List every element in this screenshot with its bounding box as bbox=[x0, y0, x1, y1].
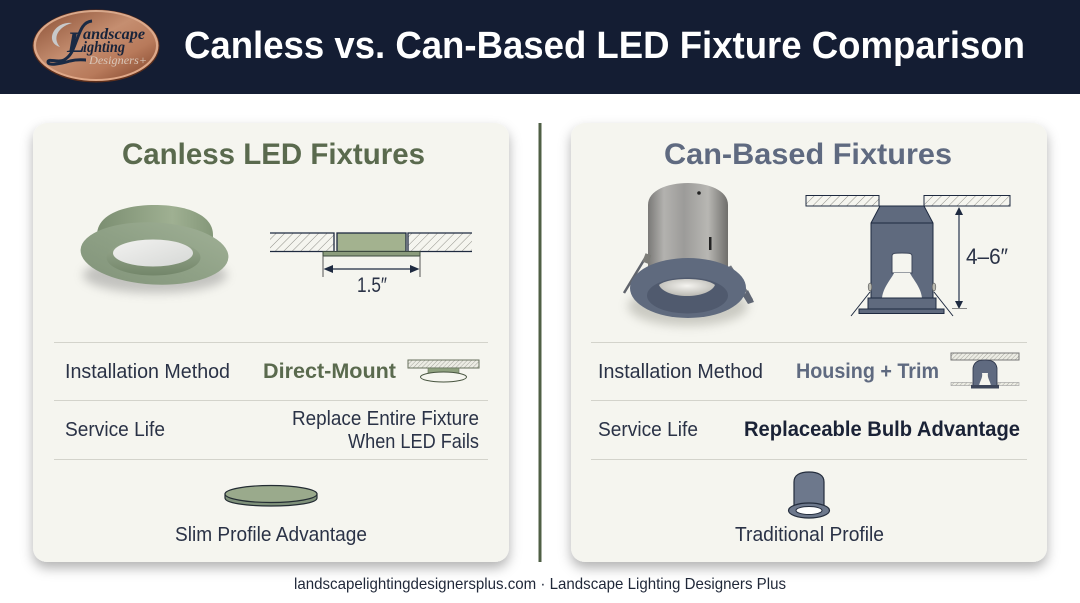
dimension: 1.5 inch: 1.5″ bbox=[357, 274, 387, 297]
row: installation method: Housing + Trim bbox=[796, 360, 939, 383]
icon: slim disc bbox=[225, 486, 317, 506]
row: service life: Replace Entire Fixture bbox=[292, 408, 479, 430]
logo: L bbox=[66, 26, 85, 59]
row: service life: Replaceable Bulb Advantage bbox=[744, 418, 1020, 441]
row: installation method: Direct-Mount bbox=[263, 360, 396, 383]
heading: canless: Canless LED Fixtures bbox=[122, 138, 425, 171]
row: service life bbox=[591, 400, 1027, 460]
label: slim profile advantage: Slim Profile Advantage bbox=[175, 524, 367, 546]
panel: can-based fixtures bbox=[571, 123, 1047, 562]
logo bbox=[32, 10, 160, 82]
row: service life: Service Life bbox=[65, 419, 165, 441]
can fixture illustration bbox=[624, 183, 754, 326]
header banner bbox=[0, 0, 1080, 94]
dimension: 4-6 inch: 4–6″ bbox=[966, 244, 1008, 269]
canless fixture illustration bbox=[79, 205, 230, 293]
logo: Designers+ bbox=[88, 55, 147, 67]
title: Canless vs. Can-Based LED Fixture Comparison bbox=[184, 25, 1025, 67]
canless section diagram bbox=[270, 233, 472, 297]
can section diagram bbox=[806, 196, 1010, 316]
row: service life: When LED Fails bbox=[348, 431, 479, 453]
panel: canless LED fixtures bbox=[33, 123, 509, 562]
logo: ighting bbox=[83, 39, 125, 56]
row: service life bbox=[54, 400, 488, 460]
row: installation method bbox=[591, 342, 1027, 388]
row: installation method: Installation Method bbox=[598, 361, 763, 383]
row: installation method: Installation Method bbox=[65, 361, 230, 383]
row: service life: Service Life bbox=[598, 419, 698, 441]
row: installation method bbox=[54, 342, 488, 383]
footer: landscapelightingdesignersplus.com · Landscape Lighting Designers Plus bbox=[294, 576, 786, 593]
heading: can-based: Can-Based Fixtures bbox=[664, 138, 952, 171]
icon: traditional can bbox=[788, 472, 830, 518]
centre divider bbox=[538, 123, 542, 562]
label: traditional profile: Traditional Profile bbox=[735, 524, 884, 546]
logo: andscape bbox=[83, 26, 145, 43]
